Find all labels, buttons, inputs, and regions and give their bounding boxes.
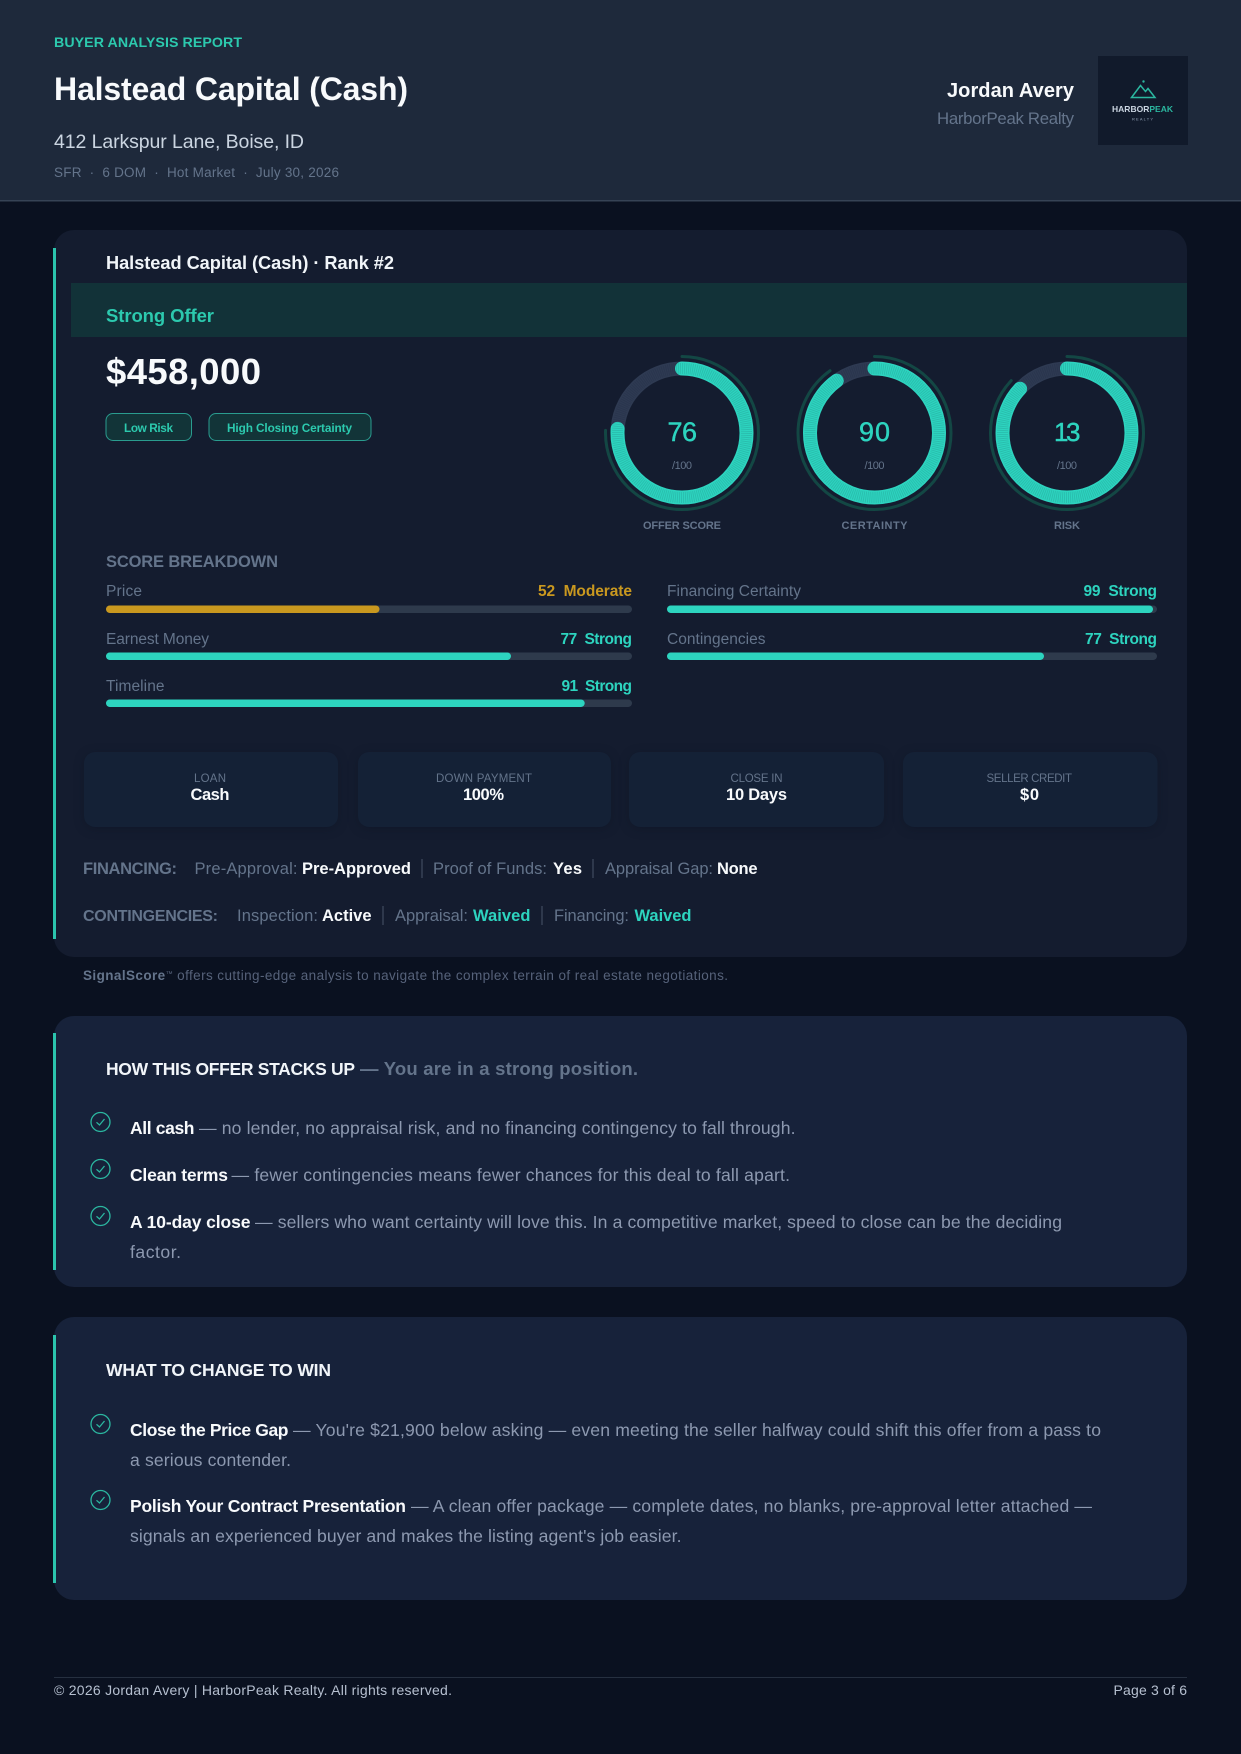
panel heading: — You are in a strong position. bbox=[360, 1058, 638, 1079]
item: all cash bbox=[91, 1112, 796, 1138]
panel heading bbox=[106, 1058, 638, 1079]
panel: offer summary bbox=[53, 230, 1187, 957]
gauge: offer score: /100 bbox=[672, 460, 692, 472]
stat tile: loan: LOAN bbox=[194, 773, 226, 785]
item: clean terms: Clean terms bbox=[130, 1165, 228, 1185]
logo: REALTY bbox=[1132, 116, 1153, 122]
score breakdown heading: SCORE BREAKDOWN bbox=[106, 553, 278, 571]
score bar: financing certainty: Financing Certainty bbox=[667, 583, 801, 600]
gauge: risk: /100 bbox=[1057, 460, 1077, 472]
signalscore note: offers cutting-edge analysis to navigate the complex terrain of real estate negotiations. bbox=[173, 968, 728, 983]
score bar: earnest money bbox=[106, 631, 632, 660]
stat tile: down payment bbox=[358, 752, 611, 827]
stat tile: close in bbox=[629, 752, 884, 827]
eyebrow: BUYER ANALYSIS REPORT bbox=[54, 35, 242, 51]
score bar: timeline: 91 Strong bbox=[562, 678, 632, 695]
property meta: SFR · 6 DOM · Hot Market · July 30, 2026 bbox=[54, 165, 339, 180]
gauge: risk: 13 bbox=[1054, 417, 1080, 447]
footer: Page 3 of 6 bbox=[1114, 1682, 1187, 1698]
item: polish your contract presentation: signals an experienced buyer and makes the listing agent's job easier. bbox=[130, 1526, 682, 1546]
stat tile: seller credit bbox=[903, 752, 1158, 827]
contingencies line: Active bbox=[322, 907, 372, 925]
logo: HARBORPEAK bbox=[1112, 104, 1174, 114]
gauge: certainty: CERTAINTY bbox=[842, 520, 908, 532]
item: close the price gap: Close the Price Gap bbox=[130, 1420, 288, 1440]
stat tile: close in: CLOSE IN bbox=[730, 773, 782, 785]
score bar: earnest money: Earnest Money bbox=[106, 631, 209, 648]
gauge: offer score: 76 bbox=[668, 417, 697, 447]
score bar: contingencies bbox=[667, 631, 1157, 660]
pill: high closing certainty: High Closing Certainty bbox=[227, 421, 352, 435]
signalscore note: ™ bbox=[166, 971, 173, 978]
panel heading: WHAT TO CHANGE TO WIN bbox=[106, 1360, 331, 1380]
contingencies line: Waived bbox=[473, 907, 530, 925]
financing line: FINANCING: bbox=[83, 860, 177, 878]
panel heading: HOW THIS OFFER STACKS UP bbox=[106, 1059, 355, 1079]
item: polish your contract presentation: Polish Your Contract Presentation bbox=[130, 1496, 406, 1516]
panel: how this offer stacks up bbox=[53, 1016, 1187, 1287]
pill: high closing certainty bbox=[209, 414, 371, 440]
item: 10-day close: A 10-day close bbox=[130, 1212, 251, 1232]
gauge: offer score: OFFER SCORE bbox=[643, 520, 721, 532]
financing line: Appraisal Gap: bbox=[605, 860, 713, 878]
stat tile: close in: 10 Days bbox=[726, 786, 787, 804]
agent name: Jordan Avery bbox=[947, 80, 1075, 102]
score bar: price: 52 Moderate bbox=[538, 583, 632, 600]
score bar: price bbox=[106, 583, 632, 613]
item: clean terms bbox=[91, 1160, 790, 1185]
header band bbox=[0, 0, 1241, 202]
score bar: financing certainty bbox=[667, 583, 1157, 613]
gauge: certainty bbox=[798, 356, 951, 532]
contingencies line bbox=[83, 906, 692, 925]
status band: Strong Offer bbox=[106, 305, 214, 326]
contingencies line: Financing: bbox=[554, 907, 629, 925]
financing line: Pre-Approval: bbox=[194, 860, 298, 878]
score bar: price: Price bbox=[106, 583, 142, 600]
score bar: timeline: Timeline bbox=[106, 678, 164, 695]
logo bbox=[1098, 56, 1188, 145]
contingencies line: Appraisal: bbox=[395, 907, 468, 925]
stat tile: down payment: DOWN PAYMENT bbox=[436, 773, 532, 785]
offer heading: Halstead Capital (Cash) · Rank #2 bbox=[106, 253, 394, 273]
item: close the price gap bbox=[91, 1414, 1101, 1470]
contingencies line: Inspection: bbox=[237, 907, 318, 925]
pill: low risk bbox=[106, 414, 192, 440]
gauge: offer score bbox=[606, 356, 758, 532]
stat tile: loan: Cash bbox=[190, 786, 230, 804]
signalscore note: SignalScore bbox=[83, 968, 166, 983]
offer price: $458,000 bbox=[106, 351, 261, 392]
contingencies line: CONTINGENCIES: bbox=[83, 908, 218, 925]
pill: low risk: Low Risk bbox=[124, 421, 173, 435]
financing line: Proof of Funds: bbox=[433, 860, 547, 878]
item: all cash: — no lender, no appraisal risk, and no financing contingency to fall through. bbox=[199, 1118, 796, 1138]
panel: what to change to win bbox=[53, 1317, 1187, 1600]
stat tile: loan bbox=[84, 752, 338, 827]
financing line: Yes bbox=[553, 860, 582, 878]
gauge: risk: RISK bbox=[1054, 520, 1080, 532]
score bar: timeline bbox=[106, 678, 632, 707]
gauge: risk bbox=[990, 356, 1144, 532]
financing line bbox=[83, 859, 758, 878]
title: Halstead Capital (Cash) bbox=[54, 71, 408, 107]
item: all cash: All cash bbox=[130, 1118, 194, 1138]
stat tile: down payment: 100% bbox=[463, 786, 504, 804]
item: 10-day close bbox=[91, 1206, 1062, 1262]
gauge: certainty: 90 bbox=[859, 417, 890, 447]
score bar: earnest money: 77 Strong bbox=[560, 631, 632, 648]
item: close the price gap: a serious contender. bbox=[130, 1450, 291, 1470]
gauge: certainty: /100 bbox=[864, 460, 884, 472]
stat tile: seller credit: $0 bbox=[1020, 786, 1039, 804]
item: 10-day close: — sellers who want certainty will love this. In a competitive market, speed to close can be the deciding bbox=[255, 1212, 1062, 1232]
score bar: contingencies: 77 Strong bbox=[1085, 631, 1157, 648]
item: 10-day close: factor. bbox=[130, 1242, 181, 1262]
footer bbox=[54, 1677, 1187, 1698]
item: close the price gap: — You're $21,900 below asking — even meeting the seller halfway could shift this offer from a pass to bbox=[293, 1420, 1101, 1440]
financing line: Pre-Approved bbox=[302, 860, 411, 878]
stat tile: seller credit: SELLER CREDIT bbox=[986, 773, 1072, 785]
score bar: financing certainty: 99 Strong bbox=[1084, 583, 1157, 600]
score bar: contingencies: Contingencies bbox=[667, 631, 766, 648]
address: 412 Larkspur Lane, Boise, ID bbox=[54, 131, 304, 153]
financing line: None bbox=[717, 860, 758, 878]
item: polish your contract presentation bbox=[91, 1490, 1092, 1546]
footer: © 2026 Jordan Avery | HarborPeak Realty. All rights reserved. bbox=[54, 1682, 452, 1698]
status band bbox=[71, 283, 1187, 337]
item: polish your contract presentation: — A clean offer package — complete dates, no blanks, pre-approval letter attached — bbox=[411, 1496, 1092, 1516]
agent company: HarborPeak Realty bbox=[937, 109, 1075, 128]
item: clean terms: — fewer contingencies means fewer chances for this deal to fall apart. bbox=[232, 1165, 790, 1185]
contingencies line: Waived bbox=[634, 907, 692, 925]
